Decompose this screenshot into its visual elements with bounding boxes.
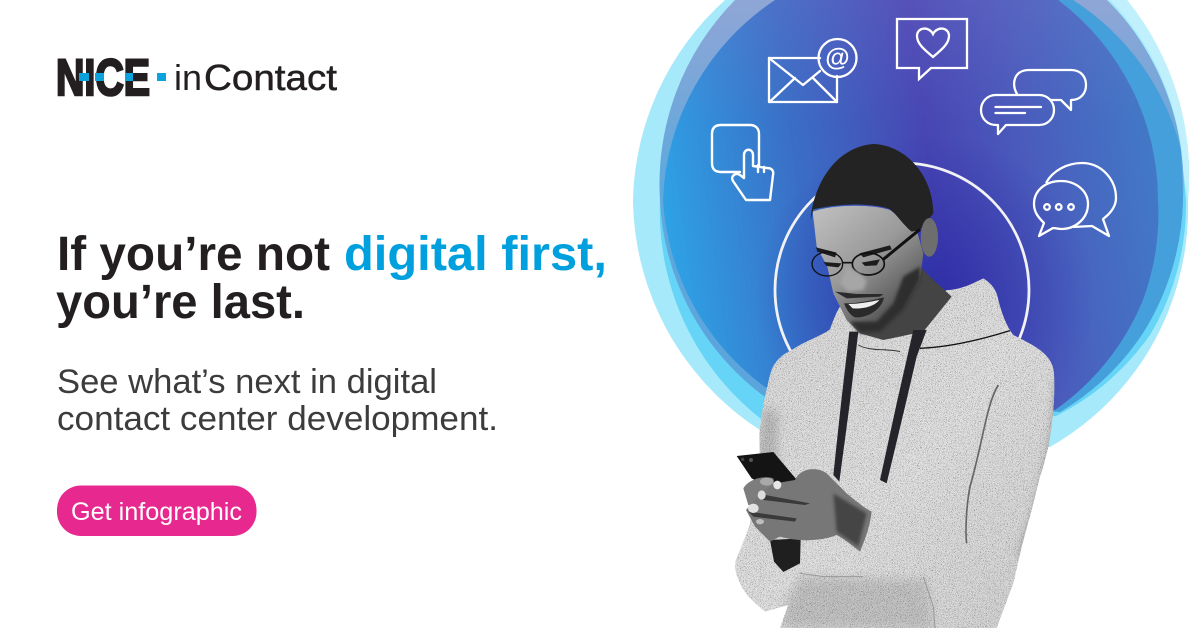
ear <box>921 218 938 257</box>
button: Get infographic <box>57 486 256 536</box>
logo: NICE inContact: NICE <box>56 49 150 106</box>
hoodie folds <box>800 331 1010 628</box>
neck <box>860 267 952 340</box>
hands <box>743 469 872 552</box>
subheading <box>57 363 498 438</box>
drawstrings <box>833 330 927 483</box>
logo: NICE inContact <box>56 49 337 106</box>
background circles <box>633 0 1189 470</box>
mouth <box>844 297 884 317</box>
icon: heart speech bubble <box>897 19 967 79</box>
beard shading <box>850 267 920 333</box>
icon: envelope with at sign: @ <box>825 44 850 72</box>
icon: envelope with at sign <box>769 39 856 102</box>
subheading: See what’s next in digital <box>57 363 437 401</box>
glasses <box>812 229 920 276</box>
left wrist <box>770 538 801 572</box>
logo: NICE inContact: in <box>174 57 202 98</box>
icon: chat bubbles with lines <box>981 70 1086 134</box>
button: Get infographic: Get infographic <box>71 498 242 526</box>
face <box>813 206 923 333</box>
person with phone <box>735 144 1067 628</box>
subheading: contact center development. <box>57 400 498 438</box>
nose <box>840 267 867 292</box>
white ring <box>775 163 1029 417</box>
icon: round chat bubbles with dots <box>1034 163 1116 236</box>
hoodie <box>735 278 1067 628</box>
heading: If you’re not <box>57 228 330 281</box>
eyebrows and eyes <box>816 245 892 267</box>
heading <box>56 228 607 329</box>
logo: NICE inContact: Contact <box>204 57 337 98</box>
icon: finger pressing a button <box>712 125 773 200</box>
hair <box>811 144 933 232</box>
phone <box>737 452 813 503</box>
heading: digital first, <box>344 228 607 281</box>
heading: you’re last. <box>56 276 305 329</box>
